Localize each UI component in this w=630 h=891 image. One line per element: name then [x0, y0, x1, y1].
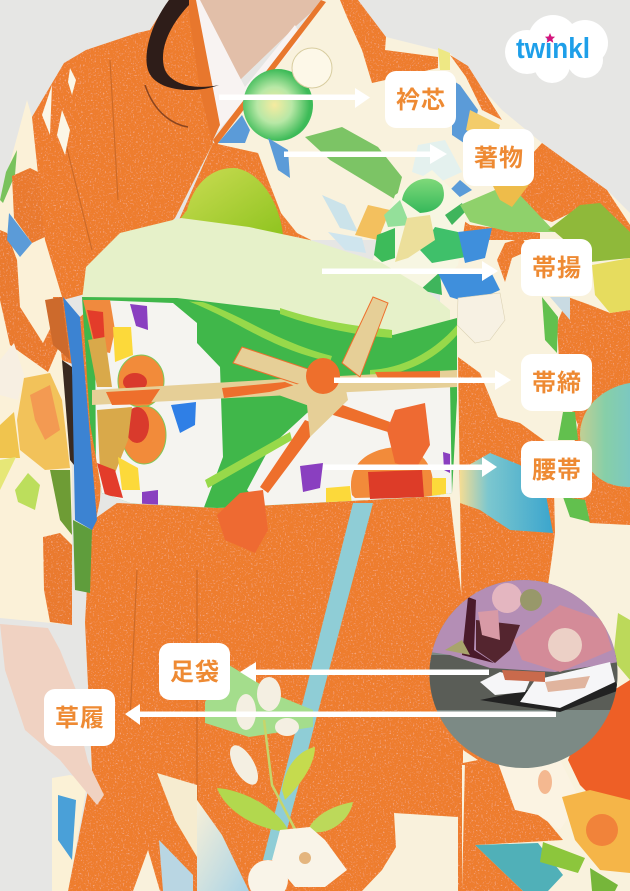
arrow: obiage — [322, 261, 498, 281]
label: 帯揚: 帯揚 — [532, 255, 582, 282]
label: 帯揚 — [521, 239, 592, 296]
teal stripe — [263, 503, 373, 860]
label: 草履 — [44, 689, 115, 746]
label: 著物: 著物 — [474, 145, 524, 172]
skirt cream panels — [52, 773, 458, 891]
left sleeve — [0, 100, 78, 625]
hair — [146, 0, 219, 90]
logo: twinkl cloud — [505, 15, 608, 83]
obi jime cord — [92, 297, 457, 493]
sleeve blue petal — [7, 213, 32, 257]
obi white right panel — [247, 385, 452, 512]
label: 足袋 — [159, 643, 230, 700]
blue stripe — [63, 297, 97, 530]
obi upper flower — [83, 300, 115, 353]
obi lower right flower — [351, 447, 433, 498]
right sleeve blue shape — [460, 453, 553, 533]
label: 腰帯 — [521, 441, 592, 498]
neck — [198, 0, 325, 80]
white under-collar — [190, 0, 302, 132]
logo: twinkl cloud: twinkl — [516, 33, 590, 65]
right sleeve teal circle — [580, 383, 630, 487]
chest leaf — [305, 127, 402, 200]
sleeve green leaf — [0, 150, 17, 203]
sleeve orange bands — [0, 168, 75, 625]
obi — [82, 297, 457, 512]
label: 衿芯: 衿芯 — [396, 87, 446, 114]
label: 帯締: 帯締 — [532, 370, 582, 397]
tassels — [217, 403, 430, 553]
branch flowers — [217, 677, 353, 891]
collar piping — [187, 0, 326, 146]
label: 著物 — [463, 129, 534, 186]
right side kimono base — [213, 0, 630, 891]
cream chip — [463, 750, 478, 763]
sleeve dark folds and green — [62, 360, 78, 470]
label: 草履: 草履 — [55, 705, 105, 732]
green orchid flower — [372, 170, 500, 303]
inset photo: zori and tabi — [429, 580, 620, 770]
right lower flowers — [475, 613, 630, 891]
right sleeve leaves — [542, 297, 590, 522]
right leaf — [460, 190, 555, 232]
arrow: obi — [323, 457, 497, 477]
sleeve white flower — [0, 343, 24, 400]
left green strip — [73, 520, 92, 593]
label: 足袋: 足袋 — [170, 659, 220, 686]
obi white left panel — [95, 300, 223, 510]
right lime shapes — [548, 203, 630, 320]
yellow accent by leaf — [490, 178, 534, 207]
hand — [0, 624, 104, 805]
obi lime stripes — [180, 298, 457, 488]
white flower right of obi — [457, 293, 505, 343]
skirt green blob — [205, 665, 313, 737]
label: 腰帯: 腰帯 — [532, 457, 582, 484]
yellow shoulder stripe — [438, 48, 450, 70]
arrow: juban collar — [219, 88, 370, 108]
arrow: tabi — [240, 662, 489, 682]
left hair shadow — [145, 85, 188, 127]
arrow: kimono — [284, 144, 447, 164]
lime shape on chest — [181, 168, 283, 235]
arrow: zori — [125, 704, 556, 725]
arrow: obijime — [334, 370, 511, 390]
label: 帯締 — [521, 354, 592, 411]
chest flower: green peony — [218, 48, 332, 178]
label: 衿芯 — [385, 71, 456, 128]
left fold lines — [60, 60, 197, 800]
sleeve yellow flower — [17, 373, 70, 470]
pale flower and yellow blue petals — [322, 80, 500, 253]
sleeve flower petals — [42, 68, 76, 155]
obi age — [82, 218, 450, 335]
